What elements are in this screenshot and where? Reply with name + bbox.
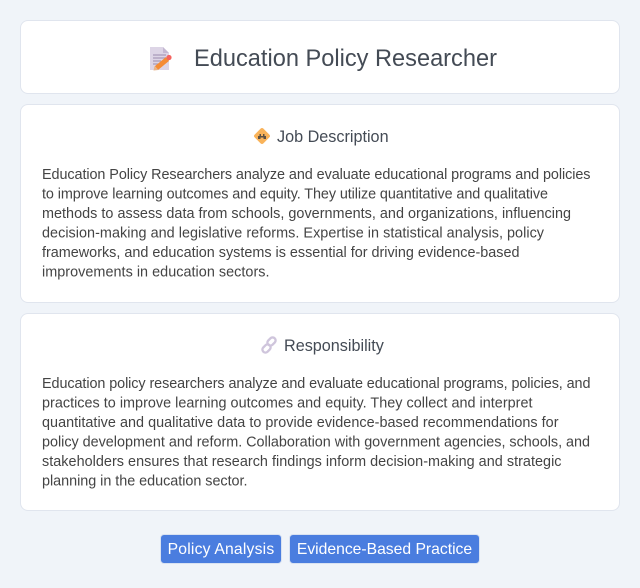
tag: policy analysis: Policy Analysis: [168, 541, 274, 558]
text: responsibility body: planning in the education sector.: [42, 474, 248, 490]
text: responsibility body: policy development and reform. Collaboration with government agencies, schools, and: [42, 434, 590, 450]
text: responsibility body: quantitative and qualitative data to provide evidence-based recommendations for: [42, 415, 559, 431]
text: job description body: methods to assess data from schools, governments, and organizations, influencing: [42, 206, 571, 222]
text: responsibility body: practices to improve learning outcomes and equity. They collect and interpret: [42, 396, 532, 412]
heading: job description: Job Description: [277, 128, 389, 146]
icon: warning diamond: [254, 128, 270, 144]
icon: document with pencil: [150, 47, 172, 70]
text: job description body: to improve learning outcomes and equity. They utilize quantitative and qualitative: [42, 186, 548, 202]
heading: responsibility: Responsibility: [284, 336, 384, 354]
tag: policy analysis: [160, 534, 282, 564]
text: job description body: improvements in education sectors.: [42, 264, 270, 280]
text: responsibility body: Education policy researchers analyze and evaluate educational programs, policies, and: [42, 376, 590, 392]
tag: evidence-based practice: Evidence-Based Practice: [297, 541, 472, 558]
text: job description body: decision-making and legislative reforms. Expertise in statistical analysis, policy: [42, 226, 545, 242]
text: job description body: frameworks, and education systems is essential for driving evidence-based: [42, 245, 520, 261]
icon: chain link: [261, 336, 277, 354]
panel: responsibility: [20, 313, 620, 511]
text: job description body: Education Policy Researchers analyze and evaluate educational programs and policies: [42, 167, 590, 183]
panel: job description: [20, 104, 620, 303]
text: responsibility body: stakeholders ensures that research findings inform decision-making and strategic: [42, 454, 562, 470]
text: job description body: [42, 167, 590, 280]
panel: title: [20, 20, 620, 94]
text: responsibility body: [42, 376, 590, 490]
tag: evidence-based practice: [289, 534, 480, 564]
title text: Education Policy Researcher: [194, 46, 497, 72]
